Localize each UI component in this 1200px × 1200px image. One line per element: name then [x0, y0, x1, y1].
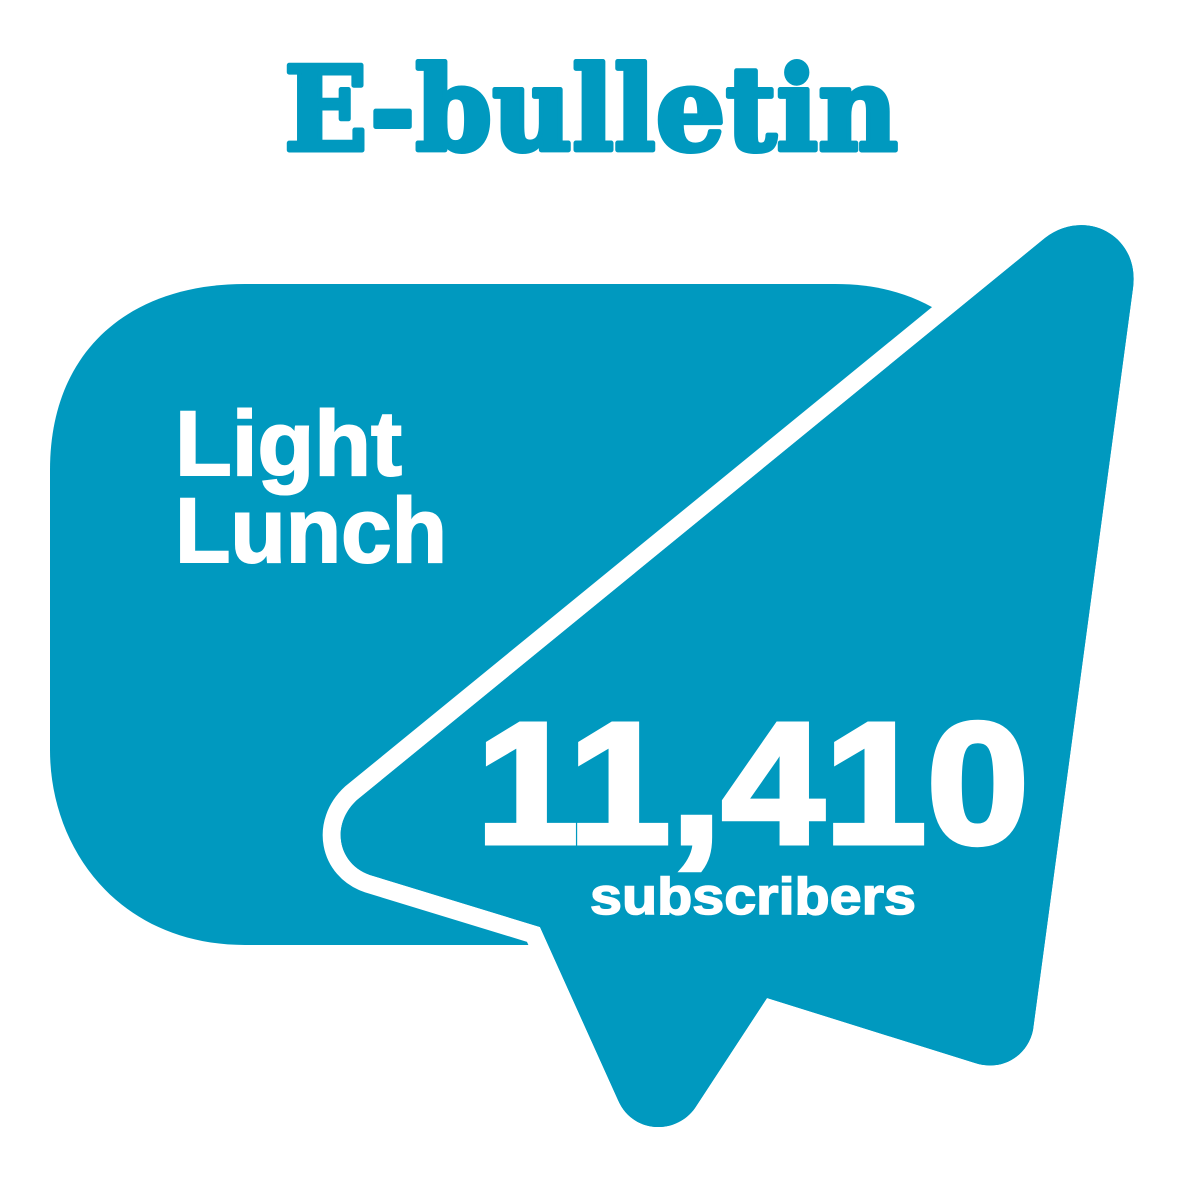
panel: speech bubble	[50, 284, 1000, 945]
title: E-bulletin	[284, 42, 898, 178]
text: newsletter name: Lunch	[175, 480, 447, 582]
panel: paper plane callout	[341, 225, 1134, 1127]
label: subscribers: subscribers	[590, 868, 916, 926]
statistic: subscriber count: 11,410	[476, 686, 1029, 880]
text: newsletter name: Light	[175, 393, 402, 495]
text: newsletter name	[175, 393, 447, 582]
